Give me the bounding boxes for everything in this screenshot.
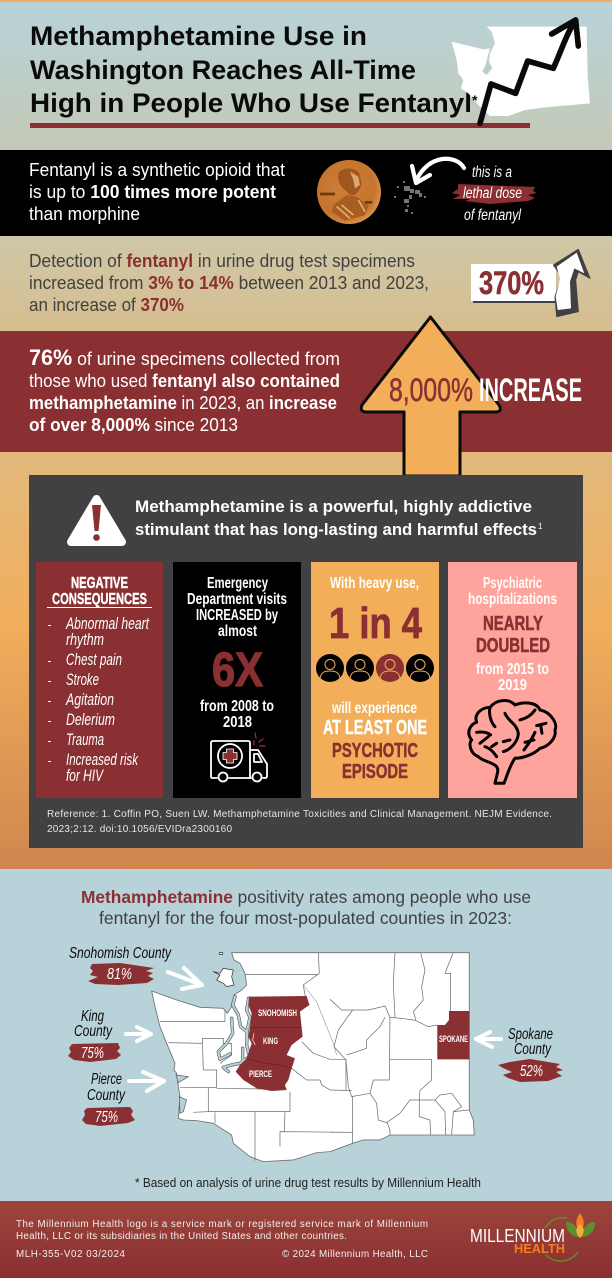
list: consequences: Delerium: [66, 710, 115, 729]
heading: negative consequences: [47, 575, 152, 608]
map: Washington counties: [152, 953, 474, 1162]
title block: Methamphetamine Use in: [30, 21, 367, 51]
heading: methamphetamine definition: Methamphetamine is a powerful, highly addictive: [135, 498, 532, 516]
callout: Spokane County: Spokane: [508, 1026, 553, 1043]
county labels: SNOHOMISH: [258, 1008, 297, 1019]
text: fentanyl detection: Detection of fentanyl in urine drug test specimens: [29, 251, 415, 271]
heading: negative consequences: NEGATIVE: [71, 575, 128, 592]
text: potency statement: than morphine: [29, 204, 140, 224]
text: legal notice: [16, 1219, 428, 1260]
text: fentanyl detection: [29, 251, 429, 315]
highlighted counties: [236, 996, 469, 1091]
callout: King County: [68, 1008, 151, 1062]
county labels: PIERCE: [249, 1069, 272, 1080]
title block: [30, 21, 472, 118]
state outline: [152, 953, 474, 1162]
San Juan islands: [213, 953, 234, 987]
card: negative consequences: [36, 562, 163, 798]
callout: Pierce County: County: [87, 1087, 126, 1104]
text: potency statement: is up to 100 times more potent: [29, 182, 276, 202]
text: ED visits: Emergency: [207, 575, 268, 592]
title block: High in People Who Use Fentanyl: [30, 88, 472, 118]
text: psychotic episode: [323, 700, 427, 783]
heading: positivity rates: Methamphetamine positivity rates among people who use: [81, 887, 531, 907]
icon: lethal dose powder specks: [394, 181, 426, 214]
callout: Spokane County: [476, 1026, 563, 1082]
arrow: 8,000% increase: [361, 317, 582, 476]
text: psychiatric hospitalizations: 2019: [498, 677, 527, 694]
arrow: points to powder: [412, 159, 464, 183]
callout: Spokane County: 52%: [520, 1063, 543, 1080]
text: with heavy use: With heavy use,: [330, 575, 419, 592]
list: consequences: for HIV: [66, 766, 104, 785]
panel: methamphetamine effects: [29, 475, 583, 848]
heading: positivity rates: fentanyl for the four most-populated counties in 2023:: [99, 908, 512, 928]
text: potency statement: Fentanyl is a synthetic opioid that: [29, 160, 285, 180]
list: consequences: Stroke: [66, 670, 99, 689]
list: consequences: Trauma: [66, 730, 104, 749]
list: consequences: [48, 614, 150, 785]
Puget Sound water: [218, 997, 250, 1072]
callout: lethal dose: this is a: [472, 164, 512, 181]
text: psychiatric hospitalizations: [468, 575, 557, 694]
heading: methamphetamine definition: stimulant that has long-lasting and harmful effects: [135, 521, 537, 539]
text: fentanyl detection: increased from 3% to 14% between 2013 and 2023,: [29, 273, 429, 293]
text: ED visits: almost: [218, 623, 257, 640]
stat: 1 in 4: 1 in 4: [329, 599, 422, 648]
heading: methamphetamine definition: 1: [538, 522, 543, 531]
callout: Pierce County: [82, 1071, 164, 1126]
heading: methamphetamine definition: [135, 498, 543, 539]
title asterisk: *: [472, 92, 478, 108]
text: co-use statement: methamphetamine in 2023, an increase: [29, 393, 337, 413]
text: legal notice: Health, LLC or its subsidiaries in the United States and other countries.: [16, 1231, 347, 1242]
panel: fentanyl potency: [0, 150, 612, 236]
text: potency statement: [29, 160, 285, 224]
county labels: KING: [263, 1036, 278, 1047]
text: co-use statement: those who used fentanyl also contained: [29, 371, 340, 391]
title block: Washington Reaches All-Time: [30, 55, 416, 85]
logo: Millennium Health: [470, 1213, 595, 1261]
stat: 6X: 6X: [212, 644, 263, 697]
panel: county map: [0, 869, 612, 1201]
text: psychotic episode: PSYCHOTIC: [332, 740, 418, 762]
text: ED visits: Department visits: [187, 591, 287, 608]
icon: ambulance: [211, 733, 267, 782]
icon: penny: [317, 160, 381, 224]
callout: Snohomish County: Snohomish County: [69, 945, 172, 962]
reference citation: 2023;2:12. doi:10.1056/EVIDra2300160: [47, 824, 232, 835]
callout: Spokane County: County: [514, 1041, 552, 1058]
panel: 76% co-use: [0, 331, 612, 452]
heading: positivity rates: [81, 887, 531, 928]
callout: lethal dose: of fentanyl: [464, 207, 521, 224]
title underline: [30, 123, 530, 128]
card: psychotic episode: [311, 562, 439, 798]
callout: Pierce County: 75%: [95, 1109, 118, 1126]
card: emergency department visits: [173, 562, 301, 798]
text: co-use statement: of over 8,000% since 2013: [29, 415, 238, 435]
list: consequences: Agitation: [65, 690, 114, 709]
footnote: * Based on analysis of urine drug test results by Millennium Health: [135, 1176, 481, 1190]
text: psychiatric hospitalizations: Psychiatric: [483, 575, 542, 592]
text: legal notice: The Millennium Health logo is a service mark or registered service mark of Millennium: [16, 1219, 428, 1230]
text: psychiatric hospitalizations: DOUBLED: [476, 635, 550, 657]
text: legal notice: © 2024 Millennium Health, LLC: [282, 1249, 428, 1260]
callout: King County: King: [81, 1008, 104, 1025]
card: psychiatric hospitalizations: [448, 562, 577, 798]
icon: warning triangle: [71, 499, 122, 542]
text: psychotic episode: will experience: [331, 700, 417, 717]
logo: Millennium Health: HEALTH: [514, 1242, 565, 1256]
icon: brain: [469, 701, 556, 783]
list: consequences: Chest pain: [66, 650, 122, 669]
county labels: SPOKANE: [439, 1034, 468, 1045]
county labels: [249, 1008, 468, 1080]
panel: footer: [0, 1201, 612, 1278]
list: consequences: rhythm: [66, 630, 104, 649]
text: psychiatric hospitalizations: NEARLY: [483, 613, 543, 635]
county borders: [160, 953, 469, 1161]
callout: Snohomish County: 81%: [107, 966, 132, 983]
callout: King County: County: [74, 1023, 113, 1040]
callout: lethal dose: lethal dose: [463, 185, 522, 202]
heading: negative consequences: CONSEQUENCES: [52, 591, 147, 608]
callout: lethal dose: [452, 164, 537, 224]
text: ED visits: [187, 575, 287, 640]
text: psychotic episode: AT LEAST ONE: [323, 717, 427, 739]
logo: Millennium Health: MILLENNIUM: [470, 1226, 565, 1246]
background gradient: [0, 0, 612, 869]
icon: Washington state with rising arrow: [452, 20, 590, 123]
reference citation: Reference: 1. Coffin PO, Suen LW. Methamphetamine Toxicities and Clinical Management. NEJM Evidence.: [47, 809, 552, 820]
text: ED years: [200, 698, 274, 731]
text: psychiatric hospitalizations: hospitalizations: [468, 591, 557, 608]
text: fentanyl detection: an increase of 370%: [29, 295, 184, 315]
icon: four people: [316, 654, 434, 682]
callout: Pierce County: Pierce: [91, 1071, 122, 1088]
text: ED years: from 2008 to: [200, 698, 274, 715]
list: consequences: Abnormal heart: [65, 614, 150, 633]
text: ED visits: INCREASED by: [196, 607, 278, 624]
callout: Snohomish County: [69, 945, 202, 989]
reference citation: [47, 809, 552, 835]
callout: 370% arrow: 370%: [479, 265, 544, 301]
text: legal notice: MLH-355-V02 03/2024: [16, 1249, 126, 1260]
callout: King County: 75%: [81, 1045, 104, 1062]
list: consequences: Increased risk: [66, 750, 139, 769]
text: ED years: 2018: [223, 714, 252, 731]
arrow: 8,000% increase: 8,000%: [389, 372, 473, 408]
text: co-use statement: 76% of urine specimens collected from: [29, 345, 340, 370]
text: psychotic episode: EPISODE: [342, 761, 408, 783]
text: psychiatric hospitalizations: from 2015 to: [476, 661, 549, 678]
callout: 370% arrow: [471, 249, 590, 317]
text: co-use statement: [29, 345, 340, 435]
